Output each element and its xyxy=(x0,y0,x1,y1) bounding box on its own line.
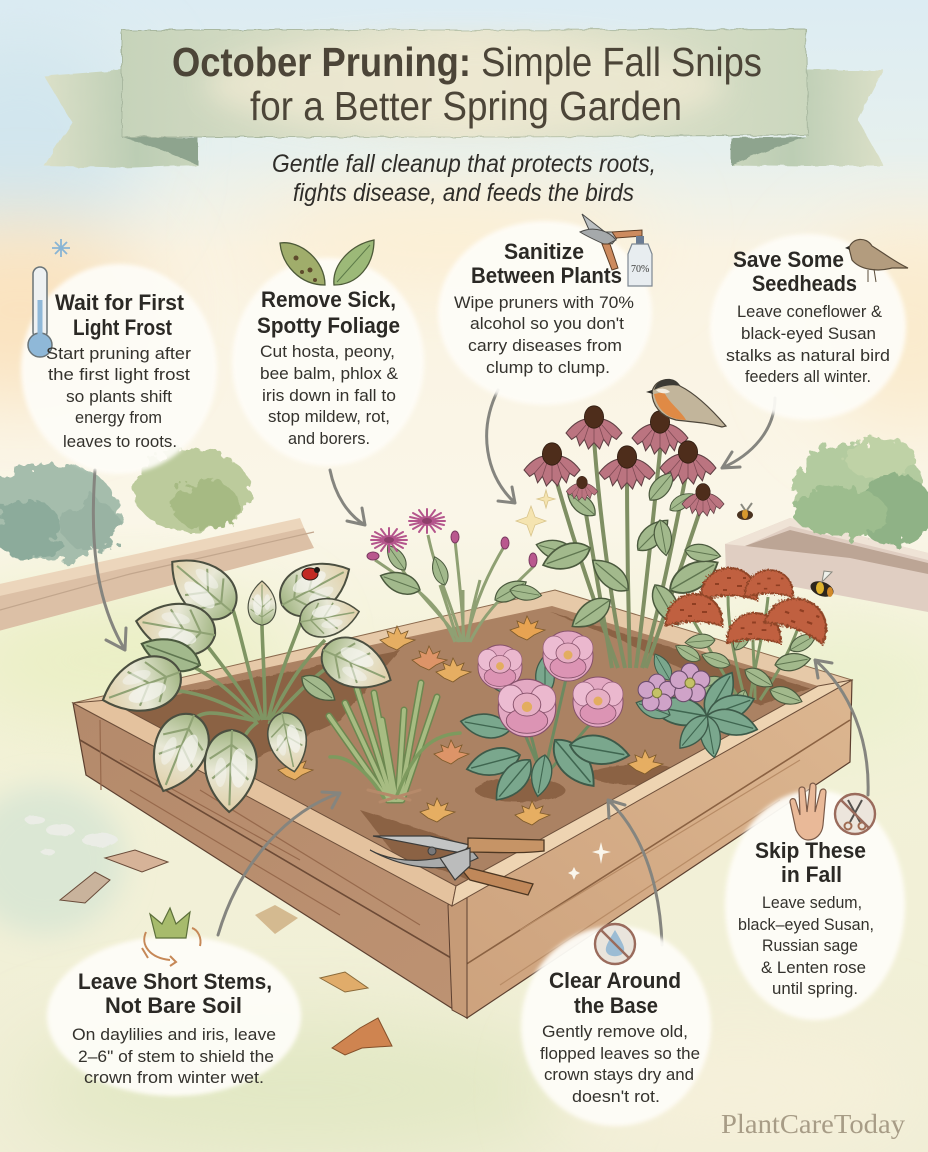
heading: Sanitize xyxy=(504,239,584,264)
title: for a Better Spring Garden xyxy=(250,83,682,129)
PlantCareToday watermark: PlantCareToday xyxy=(721,1109,906,1139)
body text xyxy=(738,894,874,998)
heading xyxy=(55,290,184,340)
heading: Remove Sick, xyxy=(261,287,396,312)
background garden bed left xyxy=(0,518,314,632)
raised wooden bed xyxy=(73,590,852,1018)
peony plant xyxy=(459,631,632,808)
ladybug xyxy=(302,567,320,580)
body text: 2–6" of stem to shield the xyxy=(78,1048,274,1066)
body text: leaves to roots. xyxy=(63,433,177,451)
body text: carry diseases from xyxy=(468,337,622,355)
icon: cut crown with arrows xyxy=(142,908,201,966)
heading xyxy=(78,969,272,1018)
body text xyxy=(454,294,634,377)
hosta plant xyxy=(94,543,400,813)
body text: black-eyed Susan xyxy=(741,325,876,343)
title xyxy=(172,39,762,129)
body text xyxy=(540,1023,700,1106)
body text: crown stays dry and xyxy=(544,1066,694,1084)
heading: Spotty Foliage xyxy=(257,313,400,338)
subtitle xyxy=(272,150,656,207)
body text: stop mildew, rot, xyxy=(268,408,390,426)
body text: stalks as natural bird xyxy=(726,347,890,365)
body text: black–eyed Susan, xyxy=(738,916,874,934)
heading xyxy=(471,239,622,288)
subtitle: fights disease, and feeds the birds xyxy=(293,179,634,207)
icon: thermometer and snowflake xyxy=(28,239,70,357)
body text: Leave sedum, xyxy=(762,894,862,912)
sedum plant xyxy=(666,568,835,721)
bird on coneflower xyxy=(646,379,726,427)
body text: doesn't rot. xyxy=(572,1088,660,1106)
background garden bed right xyxy=(725,518,928,612)
icon: small brown bird xyxy=(845,239,908,282)
arrows xyxy=(93,390,868,945)
heading: Not Bare Soil xyxy=(105,993,242,1018)
body text: On daylilies and iris, leave xyxy=(72,1026,276,1044)
panel: remove sick spotty foliage xyxy=(232,240,424,466)
heading xyxy=(733,247,857,296)
body text: so plants shift xyxy=(66,388,172,406)
panel: wait for first light frost xyxy=(21,239,217,474)
body text: alcohol so you don't xyxy=(470,315,624,333)
body text: Russian sage xyxy=(762,937,858,955)
icon: no water drop xyxy=(595,924,635,964)
body text: Start pruning after xyxy=(46,345,192,363)
front left face xyxy=(73,703,467,1018)
body text: and borers. xyxy=(288,430,370,448)
subtitle: Gentle fall cleanup that protects roots, xyxy=(272,150,656,178)
heading: Wait for First xyxy=(55,290,184,315)
body text: bee balm, phlox & xyxy=(260,365,398,383)
banner xyxy=(44,29,884,168)
fallen leaves on soil xyxy=(278,616,663,825)
sparkles xyxy=(516,490,555,536)
coneflowers xyxy=(524,406,724,668)
banner main ribbon xyxy=(122,29,808,137)
soil xyxy=(108,606,818,888)
panel: save some seedheads xyxy=(710,234,908,420)
heading: Clear Around xyxy=(549,968,681,993)
body text xyxy=(726,303,890,386)
body text: energy from xyxy=(75,409,162,427)
frost and ground leaves xyxy=(25,816,392,1055)
pruners on the bed xyxy=(370,836,544,895)
hellebore plant xyxy=(633,651,760,759)
panel: sanitize between plants xyxy=(438,214,652,405)
body text: clump to clump. xyxy=(486,359,610,377)
heading xyxy=(257,287,400,338)
body text xyxy=(72,1026,276,1087)
body text: crown from winter wet. xyxy=(84,1069,264,1087)
body text: Gently remove old, xyxy=(542,1023,688,1041)
body text: Wipe pruners with 70% xyxy=(454,294,634,312)
heading: Skip These xyxy=(755,838,866,863)
heading: Light Frost xyxy=(73,315,172,340)
heading: Seedheads xyxy=(752,271,857,296)
body text: the first light frost xyxy=(48,366,190,384)
icon: pruners and alcohol bottle xyxy=(580,214,652,286)
heading: in Fall xyxy=(781,862,842,887)
front rims xyxy=(73,700,456,906)
title: October Pruning: Simple Fall Snips xyxy=(172,39,762,85)
heading xyxy=(549,968,681,1018)
body text: until spring. xyxy=(772,980,858,998)
background shrubs left xyxy=(0,448,250,562)
body text: Cut hosta, peony, xyxy=(260,343,395,361)
heading: the Base xyxy=(574,993,658,1018)
panel: skip these in fall xyxy=(725,783,905,1020)
body text: & Lenten rose xyxy=(761,959,866,977)
heading xyxy=(755,838,866,887)
icon: pruners and alcohol bottle: 70% xyxy=(631,264,649,275)
body text: iris down in fall to xyxy=(262,387,396,405)
bed corner post xyxy=(448,895,467,1018)
heading: Leave Short Stems, xyxy=(78,969,272,994)
body text: flopped leaves so the xyxy=(540,1045,700,1063)
front right face xyxy=(452,680,852,1018)
bee balm plant xyxy=(367,509,543,642)
icon: spotted leaves xyxy=(280,240,374,285)
icon: no scissors xyxy=(835,794,875,834)
body text: Leave coneflower & xyxy=(737,303,882,321)
panel: leave short stems xyxy=(47,908,301,1096)
body text xyxy=(260,343,398,448)
heading: Save Some xyxy=(733,247,844,272)
body text xyxy=(46,345,192,451)
bed back rim xyxy=(73,590,852,705)
sparkles on wood xyxy=(568,842,611,880)
background shrub right xyxy=(792,438,928,546)
panel: clear around the base xyxy=(521,924,711,1126)
body text: feeders all winter. xyxy=(745,368,871,386)
daylily stems xyxy=(329,683,460,802)
heading: Between Plants xyxy=(471,263,622,288)
bumblebees xyxy=(737,503,836,600)
banner tails xyxy=(44,70,884,168)
icon: stop hand xyxy=(790,783,826,840)
